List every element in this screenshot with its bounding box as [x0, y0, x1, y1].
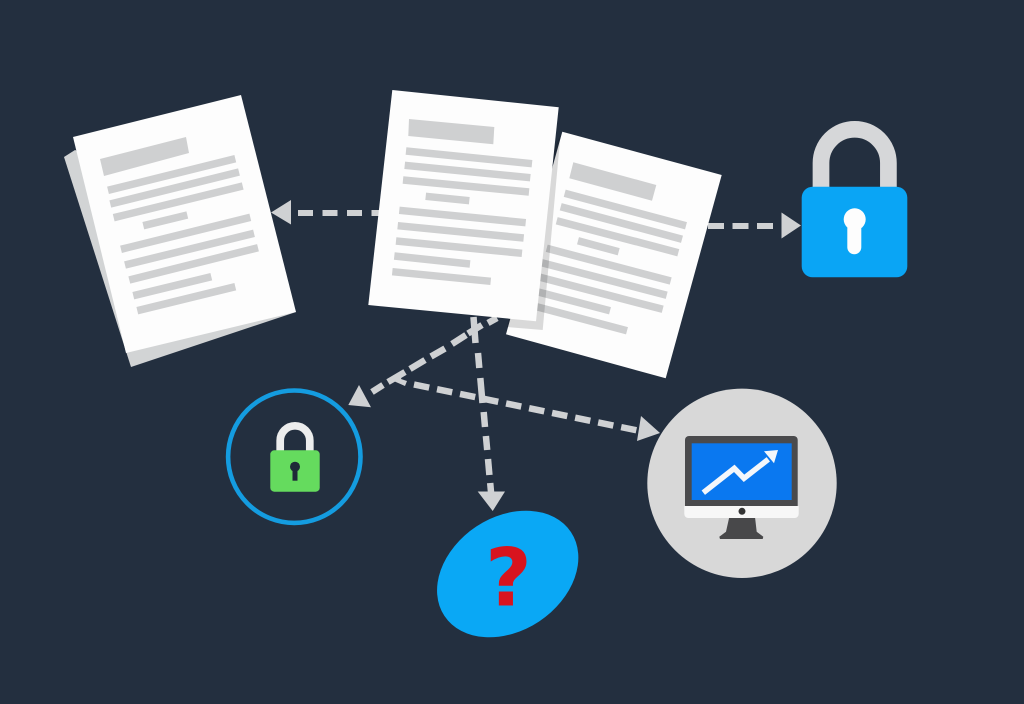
icon: blue ellipse with question mark	[413, 485, 602, 663]
document: right page	[506, 132, 722, 378]
arrow: center document to left document	[271, 200, 382, 224]
document: left page stack	[64, 95, 296, 367]
icon: blue ellipse with question mark: ?	[485, 532, 532, 624]
icon: monitor with rising chart in grey circle	[647, 389, 837, 578]
icon: blue padlock	[802, 129, 907, 277]
icon: green padlock in blue ring	[228, 390, 360, 523]
arrow: documents to question mark	[474, 317, 505, 511]
arrow: documents to monitor	[389, 372, 660, 441]
arrow: right document to blue padlock	[708, 212, 801, 238]
arrow: documents to green padlock	[348, 318, 497, 407]
document: center page	[368, 90, 559, 321]
